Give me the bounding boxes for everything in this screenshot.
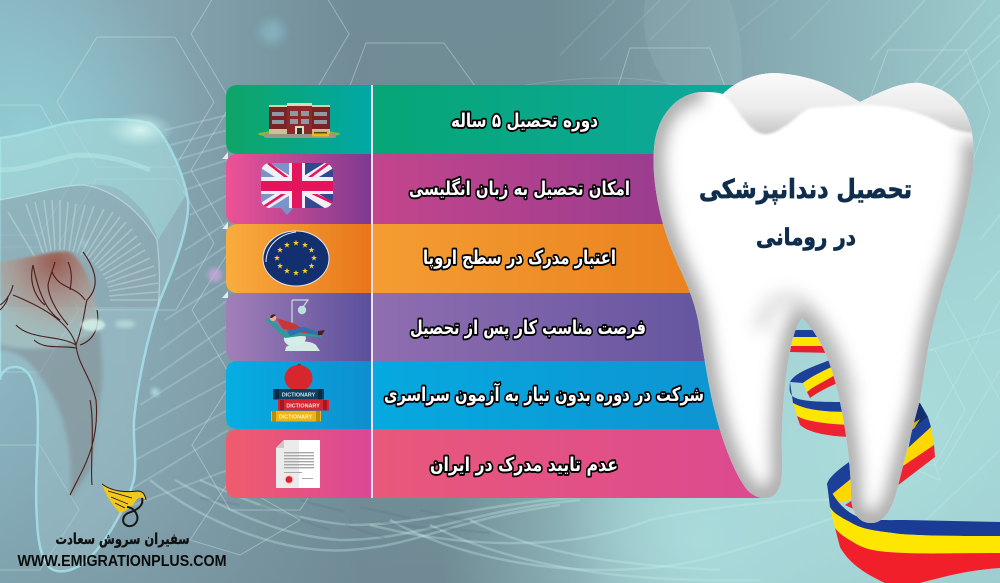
icon: certificate document xyxy=(276,440,320,488)
occlusal surface xyxy=(715,70,975,134)
title xyxy=(699,175,912,251)
icon: EU flag badge xyxy=(263,231,329,286)
book 2: DICTIONARY xyxy=(286,404,320,410)
row 3: European validity: اعتبار مدرک در سطح اروپا xyxy=(423,247,616,269)
icon: winged bird emblem xyxy=(102,484,146,526)
row 6: not recognised in Iran xyxy=(226,429,762,498)
dentin arc with radial fibres xyxy=(0,185,159,307)
icon: dental chair xyxy=(266,300,325,351)
website url: WWW.EMIGRATIONPLUS.COM xyxy=(18,553,226,570)
icon: British flag speech bubble xyxy=(261,163,333,215)
row 5: no national exam xyxy=(226,361,762,429)
row 1: 5-year programme: دوره تحصیل ۵ ساله xyxy=(451,110,598,132)
title: تحصیل دندانپزشکی xyxy=(699,175,912,205)
row 6: not recognised in Iran: عدم تایید مدرک در ایران xyxy=(430,454,618,476)
title: در رومانی xyxy=(756,225,856,251)
company name: سفیران سروش سعادت xyxy=(56,530,190,548)
nerve branches xyxy=(0,252,98,495)
book 1: DICTIONARY xyxy=(282,392,316,398)
row 2: study in English xyxy=(226,154,762,224)
tooth illustration xyxy=(654,73,974,523)
ribbon: Romanian flag colours xyxy=(790,330,1000,583)
icon: apple and dictionaries xyxy=(271,364,329,422)
logo xyxy=(18,484,226,570)
row 4: job opportunity xyxy=(226,293,762,361)
wavy bands at the bottom xyxy=(150,480,860,580)
row 1: 5-year programme xyxy=(226,85,762,154)
row 5: no national exam: شرکت در دوره بدون نیاز به آزمون سراسری xyxy=(384,382,704,406)
enamel band xyxy=(0,119,186,240)
faint tooth illustration xyxy=(0,112,188,571)
row 3: European validity xyxy=(226,224,762,293)
icon: school building xyxy=(258,103,340,138)
book 3: DICTIONARY xyxy=(279,414,313,420)
row 4: job opportunity: فرصت مناسب کار پس از تحصیل xyxy=(410,317,646,339)
panel: benefit rows xyxy=(222,85,762,498)
row 2: study in English: امکان تحصیل به زبان انگلیسی xyxy=(409,177,630,200)
